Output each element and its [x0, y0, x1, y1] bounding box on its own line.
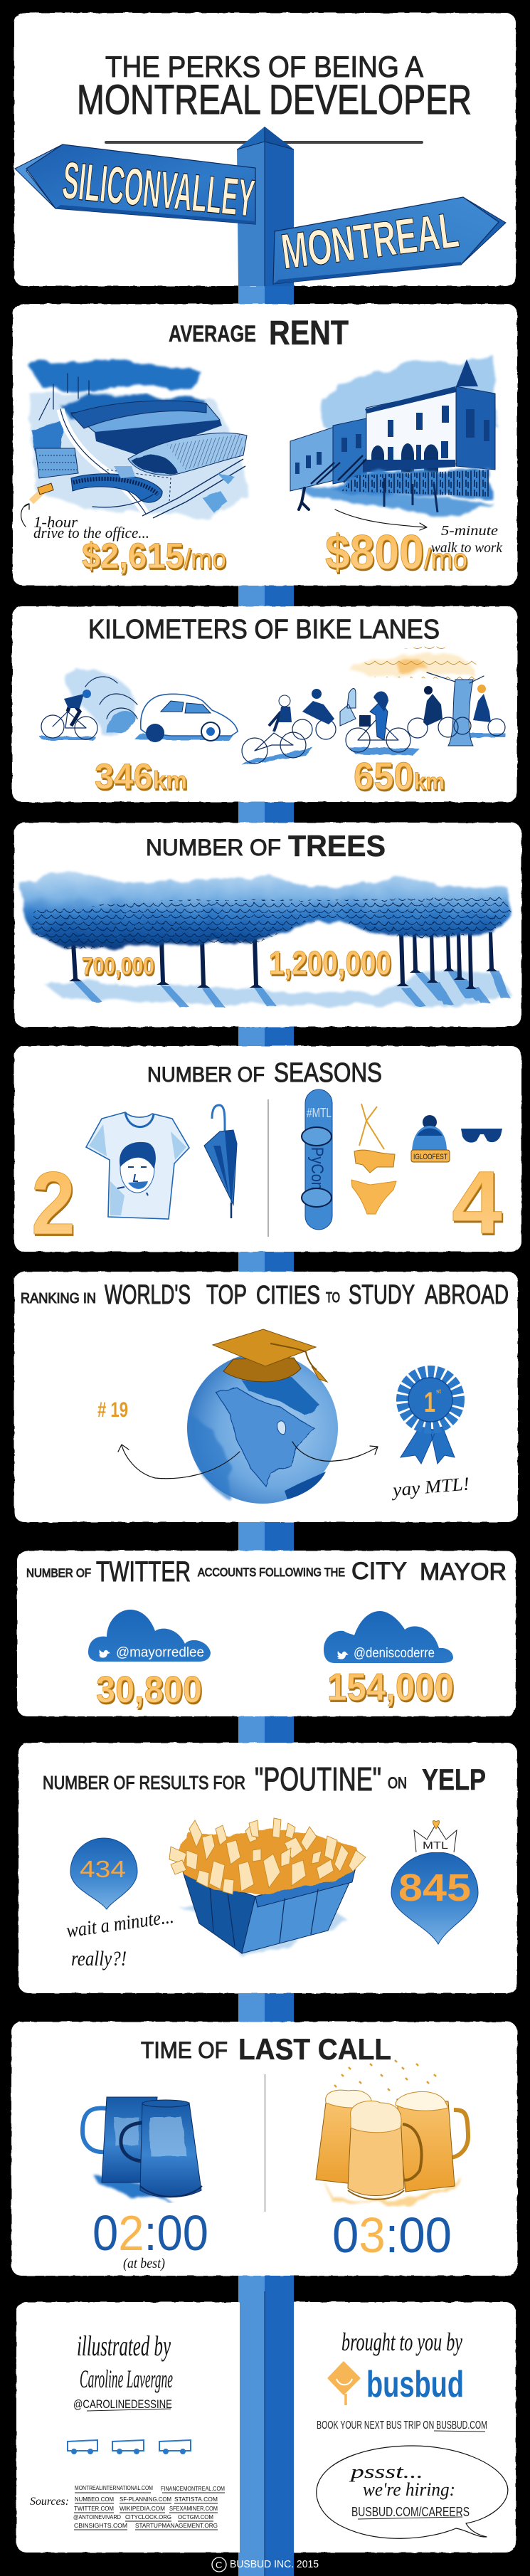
map pin: 434: 434	[80, 1856, 126, 1882]
icon: cloud mayorredlee: @mayorredlee	[116, 1645, 204, 1660]
illustration: cyclist and car with exhaust	[39, 670, 238, 742]
icon: umbrella	[204, 1105, 237, 1218]
note: illustrated by: illustrated by	[77, 2330, 171, 2362]
sources list: Sources:	[30, 2496, 69, 2508]
heading: SEASONS	[274, 1058, 382, 1088]
icon: snowboard: #MTL	[307, 1106, 332, 1120]
heading: TIME OF	[141, 2037, 228, 2063]
note: wait a minute	[65, 1906, 175, 1970]
arrow: to first place	[292, 1442, 378, 1461]
sign: Montreal	[273, 197, 506, 284]
heading	[21, 1280, 509, 1310]
note: one hour drive	[33, 513, 149, 542]
illustration: tree trunks	[69, 932, 497, 989]
sources list: TWITTER.COM	[74, 2506, 114, 2512]
illustration: Montreal cyclists under tree	[242, 646, 505, 765]
icon: snowboard	[302, 1089, 332, 1230]
heading: TOP	[206, 1280, 247, 1310]
panel: trees	[14, 823, 521, 1027]
value: San Francisco bike lanes: 346km	[95, 756, 187, 796]
note: illustrator handle: @CAROLINEDESSINE	[73, 2397, 172, 2411]
map pin: 845 with crown: 845	[398, 1867, 471, 1909]
sources list: STARTUPMANAGEMENT.ORG	[135, 2523, 218, 2529]
note: at best: (at best)	[123, 2256, 165, 2271]
speech bubble	[317, 2446, 508, 2538]
heading: "POUTINE"	[255, 1761, 381, 1798]
sources list: FINANCEMONTREAL.COM	[161, 2486, 225, 2492]
illustration: Montreal street	[290, 356, 498, 517]
value: two seasons: 2	[31, 1154, 75, 1253]
panel: seasons	[14, 1046, 521, 1253]
heading: RANKING IN	[21, 1291, 96, 1307]
illustration: tree canopy	[20, 870, 514, 949]
heading: NUMBER OF RESULTS FOR	[43, 1772, 245, 1793]
icon: cloud deniscoderre: @deniscoderre	[354, 1646, 435, 1661]
sources list: @ANTOINEVIVARD	[73, 2514, 121, 2520]
panel: study abroad	[14, 1272, 518, 1522]
icon: cloud deniscoderre	[324, 1611, 453, 1663]
note: yay MTL: yay MTL!	[390, 1473, 470, 1501]
illustration: globe	[187, 1353, 338, 1504]
heading: NUMBER OF	[26, 1566, 91, 1580]
note: wait a minute: really?!	[71, 1947, 127, 1970]
speech bubble: BUSBUD.COM/CAREERS	[351, 2505, 470, 2519]
sources list: WIKIPEDIA.COM	[120, 2506, 165, 2512]
note: one hour drive: 1-hour	[33, 513, 78, 531]
sources list: OCTGM.COM	[178, 2514, 213, 2520]
sources list: MONTREALINTERNATIONAL.COM	[75, 2485, 153, 2491]
heading: TREES	[288, 829, 386, 862]
footer copyright: BUSBUD INC. 2015	[230, 2558, 319, 2570]
sources list: CBINSIGHTS.COM	[74, 2523, 127, 2529]
heading: AVERAGE	[169, 321, 256, 347]
map pin: 845 with crown: MTL	[423, 1839, 448, 1852]
signpost top over title panel	[237, 127, 294, 286]
panel: title	[14, 13, 516, 286]
panel: poutine	[18, 1743, 517, 1993]
heading	[147, 1058, 382, 1088]
heading: NUMBER OF	[147, 1063, 265, 1087]
logo: busbud: busbud	[366, 2364, 464, 2405]
icon: beanie: IGLOOFEST	[413, 1153, 447, 1161]
icon: car	[31, 483, 53, 502]
icon: t-shirt with portrait	[86, 1112, 189, 1219]
text: SILICONVALLEY	[60, 150, 257, 228]
heading	[146, 829, 386, 862]
board label: PyCon	[307, 1147, 327, 1190]
heading: LAST CALL	[238, 2032, 391, 2066]
heading: STUDY	[349, 1280, 415, 1310]
panel: credits: Caroline Lavergne	[80, 2365, 173, 2393]
heading: KILOMETERS OF BIKE LANES	[88, 615, 440, 645]
heading: CITY	[351, 1558, 407, 1585]
speech bubble: pssst...	[349, 2461, 423, 2482]
arrow: to office note	[21, 504, 29, 527]
illustration: poutine basket	[169, 1818, 366, 1957]
note: brought to you by: brought to you by	[341, 2328, 462, 2356]
note: five minute walk	[431, 523, 503, 556]
icons: buses	[68, 2440, 191, 2454]
value: San Francisco trees: 700,000	[82, 953, 154, 980]
value: Montreal trees: 1,200,000	[269, 944, 391, 981]
heading: MAYOR	[420, 1558, 507, 1585]
heading	[169, 315, 349, 352]
heading: NUMBER OF	[146, 835, 281, 860]
icon: bikini	[351, 1104, 396, 1214]
map pin: 434	[70, 1838, 137, 1909]
footer copyright	[212, 2557, 319, 2572]
icon: beanie	[411, 1115, 450, 1162]
heading	[43, 1761, 486, 1798]
sources list: CITYCLOCK.ORG	[125, 2514, 171, 2520]
sources list: NUMBEO.COM	[75, 2496, 114, 2503]
panel: last call	[11, 2022, 517, 2276]
note: five minute walk: 5-minute	[441, 523, 498, 539]
sources list	[30, 2485, 225, 2530]
illustration: ground wash and shadows	[46, 968, 512, 1008]
logo: busbud	[329, 2363, 464, 2405]
heading: TO	[326, 1290, 340, 1306]
panel: average rent	[13, 304, 517, 586]
heading: WORLD'S	[105, 1280, 191, 1310]
heading: ON	[388, 1774, 407, 1792]
icon: first place ribbon	[401, 1372, 458, 1464]
arrow: walk to work	[335, 510, 427, 530]
heading: TWITTER	[96, 1556, 191, 1588]
icon: first place ribbon: st	[436, 1388, 441, 1395]
arrow: to rank 19	[118, 1445, 240, 1479]
map pin: 845 with crown	[391, 1820, 478, 1944]
value: rank 19: # 19	[97, 1398, 128, 1422]
title line 1: THE PERKS OF BEING A	[105, 50, 423, 83]
sources list: SFEXAMINER.COM	[169, 2506, 218, 2512]
value: deniscoderre followers: 154,000	[327, 1666, 454, 1709]
note: wait a minute: wait a minute...	[65, 1906, 175, 1943]
illustration: full yellow mugs	[316, 2060, 468, 2204]
sources list: STATISTA.COM	[174, 2496, 218, 2503]
speech bubble: we're hiring:	[363, 2479, 455, 2500]
sources list: SF-PLANNING.COM	[120, 2496, 171, 2503]
illustration: empty blue mugs	[83, 2097, 202, 2200]
signpost pole	[238, 142, 294, 2576]
icon: graduation cap	[213, 1329, 327, 1382]
value: mayorredlee followers: 30,800	[96, 1669, 202, 1711]
panel: credits	[16, 2302, 516, 2553]
value: Montreal rent: $800/mo	[325, 525, 467, 579]
panel: bike lanes	[12, 606, 517, 802]
heading	[141, 2032, 391, 2066]
heading: CITIES	[256, 1280, 320, 1309]
icon: sunglasses	[461, 1129, 502, 1143]
footer copyright: C	[216, 2560, 222, 2570]
signpost bottom over credits panel	[240, 2291, 294, 2576]
note: five minute walk: walk to work	[431, 540, 503, 556]
value: four seasons: 4	[452, 1154, 502, 1252]
heading: ACCOUNTS FOLLOWING THE	[198, 1566, 345, 1579]
illustration: Silicon Valley campus	[27, 358, 249, 518]
value: San Francisco rent: $2,615/mo	[82, 536, 226, 576]
clock: 03:00: 03:00	[332, 2207, 452, 2263]
panel: twitter	[17, 1551, 516, 1716]
heading: RENT	[269, 315, 349, 352]
heading	[26, 1556, 507, 1588]
value: Montreal bike lanes: 650km	[354, 755, 445, 798]
icon: cloud mayorredlee	[88, 1610, 211, 1662]
sign: Silicon Valley	[15, 144, 257, 228]
note: one hour drive: drive to the office...	[33, 524, 149, 542]
clock: 02:00: 02:00	[92, 2205, 208, 2261]
icon: first place ribbon: 1	[424, 1387, 435, 1418]
heading: YELP	[422, 1763, 486, 1796]
